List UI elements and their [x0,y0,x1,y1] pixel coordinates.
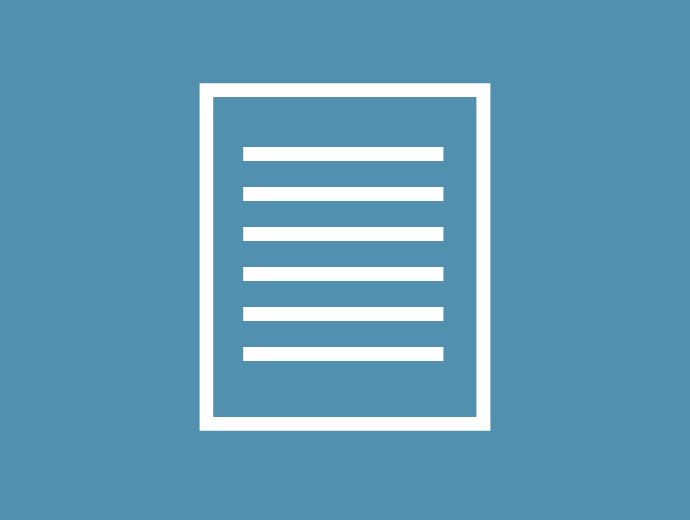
document page outline [200,83,490,431]
document text lines [243,147,443,361]
icon: document [200,83,490,431]
